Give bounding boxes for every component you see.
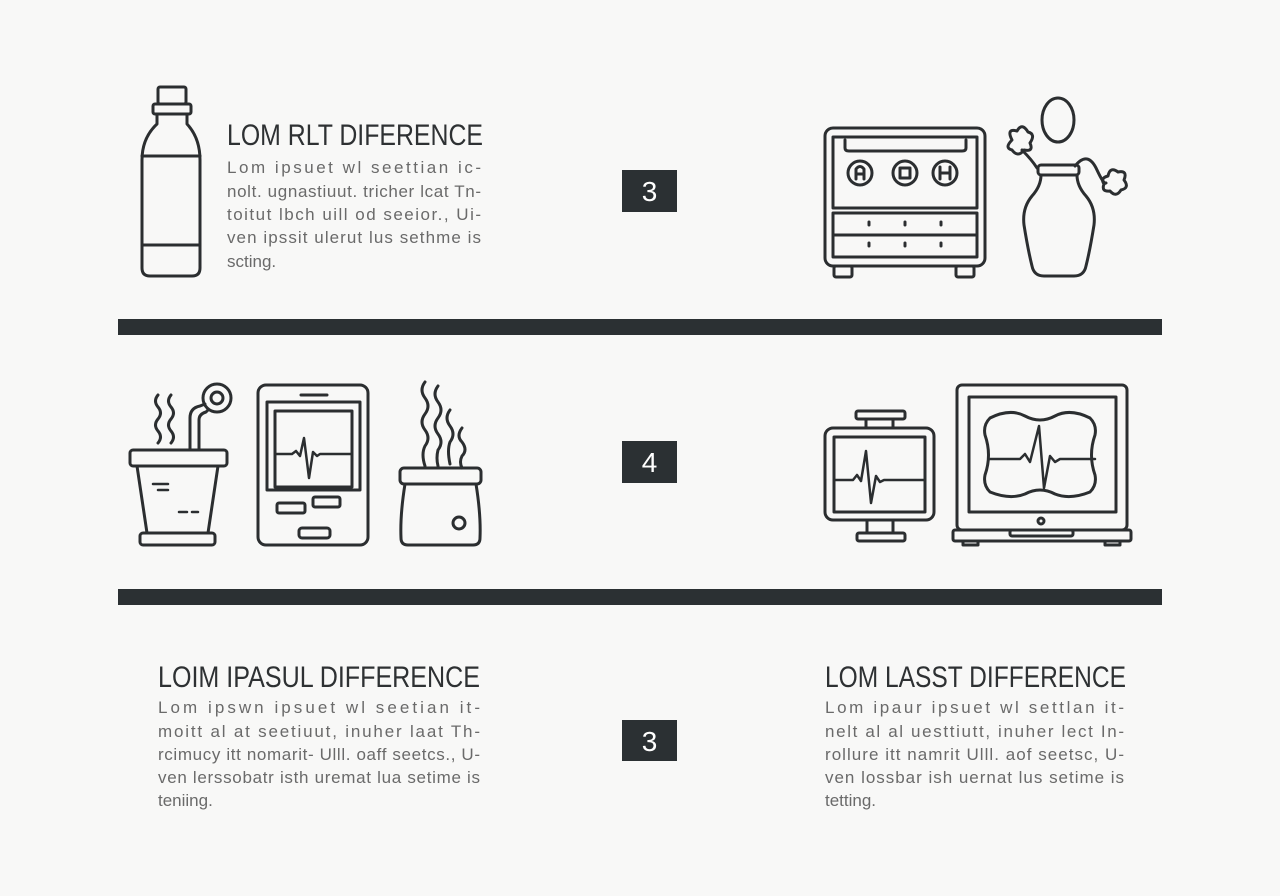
heading: top left: LOM RLT DIFERENCE (227, 119, 483, 152)
icon: oven (825, 128, 985, 277)
text block: bottom left: Lom ipswn ipsuet wl seetian it- (158, 698, 480, 717)
badge: 4 (622, 441, 677, 483)
text block: bottom right: nelt al al uesttiutt, inuher lect In- (825, 722, 1124, 741)
icon: monitor ECG (825, 411, 934, 541)
text block: bottom left: teniing. (158, 791, 213, 810)
icon: pot with probe (130, 384, 231, 545)
text block: top left: Lom ipsuet wl seettian ic- (227, 158, 481, 177)
heading: bottom left: LOIM IPASUL DIFFERENCE (158, 661, 480, 694)
text block: bottom right (825, 698, 1124, 810)
text block: bottom left (158, 698, 480, 810)
text block: bottom left: ven lerssobatr isth uremat lua setime is (158, 768, 480, 787)
text block: top left: toitut lbch uill od seeior., Ui- (227, 205, 481, 224)
heading: bottom right: LOM LASST DIFFERENCE (825, 661, 1126, 694)
badge: 3 (622, 170, 677, 212)
icon: vase with figure (1008, 98, 1126, 276)
text block: bottom right: Lom ipaur ipsuet wl settlan it- (825, 698, 1124, 717)
text block: bottom left: rcimucy itt nomarit- Ulll. oaff seetcs., U- (158, 745, 480, 764)
text block: top left (227, 158, 481, 271)
text block: top left: scting. (227, 252, 276, 271)
icon: tablet ECG (258, 385, 368, 545)
text block: bottom right: ven lossbar ish uernat lus setime is (825, 768, 1124, 787)
icon: humidifier (400, 382, 481, 545)
text block: bottom left: moitt al at seetiuut, inuher laat Th- (158, 722, 480, 741)
icon: laptop ECG (953, 385, 1131, 545)
badge: 4: 4 (642, 447, 657, 478)
text block: top left: ven ipssit ulerut lus sethme is (227, 228, 481, 247)
text block: bottom right: tetting. (825, 791, 876, 810)
text block: bottom right: rollure itt namrit Ulll. aof seetsc, U- (825, 745, 1124, 764)
badge: 3: 3 (642, 176, 657, 207)
icon: bottle (142, 87, 200, 276)
badge: 3 bottom: 3 (642, 726, 657, 757)
text block: top left: nolt. ugnastiuut. tricher lcat Tn- (227, 182, 481, 201)
badge: 3 bottom (622, 720, 677, 761)
